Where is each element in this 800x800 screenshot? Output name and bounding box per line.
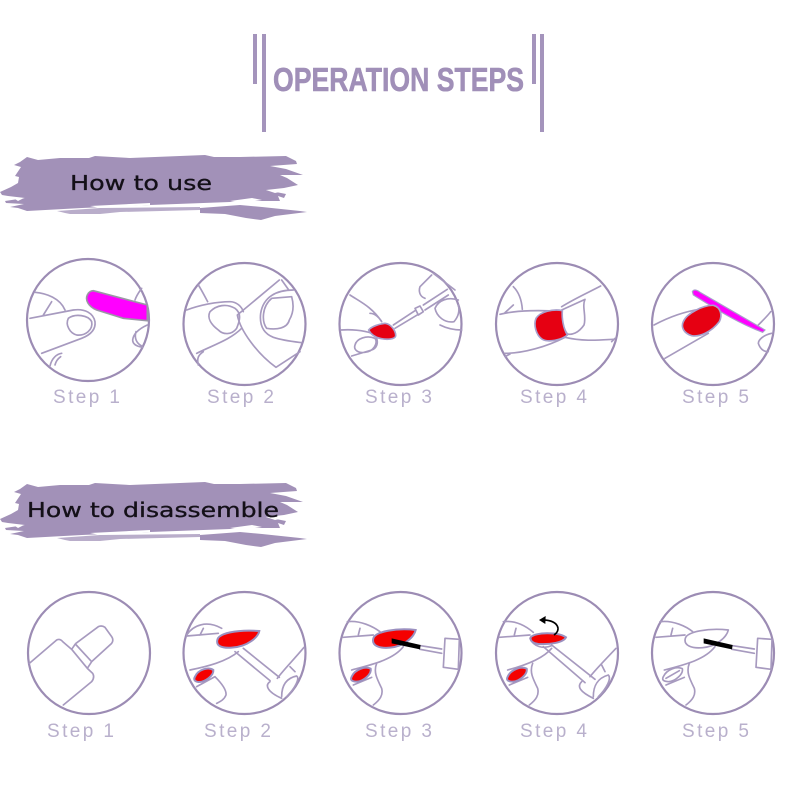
circle icon: disassemble step 3, brush the nail [340,592,462,714]
step label: Step 2 [204,721,273,742]
circle icon: disassemble step 1, remover bottle [28,592,150,714]
title: operation steps [253,34,544,132]
step label: Step 4 [520,721,589,742]
heading: how to disassemble [0,482,307,547]
circle icon: use step 3, glue the nail [340,263,462,385]
circle icon: use step 2, prepare the nail [184,263,306,385]
step label: Step 4 [520,387,589,408]
step label: Step 3 [365,721,434,742]
heading: how to use [0,155,307,220]
step label: Step 2 [207,387,276,408]
arrow [539,616,558,635]
step label: Step 1 [47,721,116,742]
circle icon: disassemble step 5, nail removed [652,592,774,714]
circle icon: disassemble step 4, lift the nail [496,592,618,714]
circle icon: use step 5, file to shape [652,263,774,385]
heading: how to use: How to use [70,171,212,195]
step label: Step 1 [53,387,122,408]
title: operation steps: OPERATION STEPS [273,61,524,98]
step label: Step 3 [365,387,434,408]
heading: how to disassemble: How to disassemble [27,498,279,522]
circle icon: use step 1, file the nail [27,259,149,381]
circle icon: use step 4, press the nail on [496,263,618,385]
step label: Step 5 [682,721,751,742]
step label: Step 5 [682,387,751,408]
circle icon: disassemble step 2, apply remover [184,592,306,714]
